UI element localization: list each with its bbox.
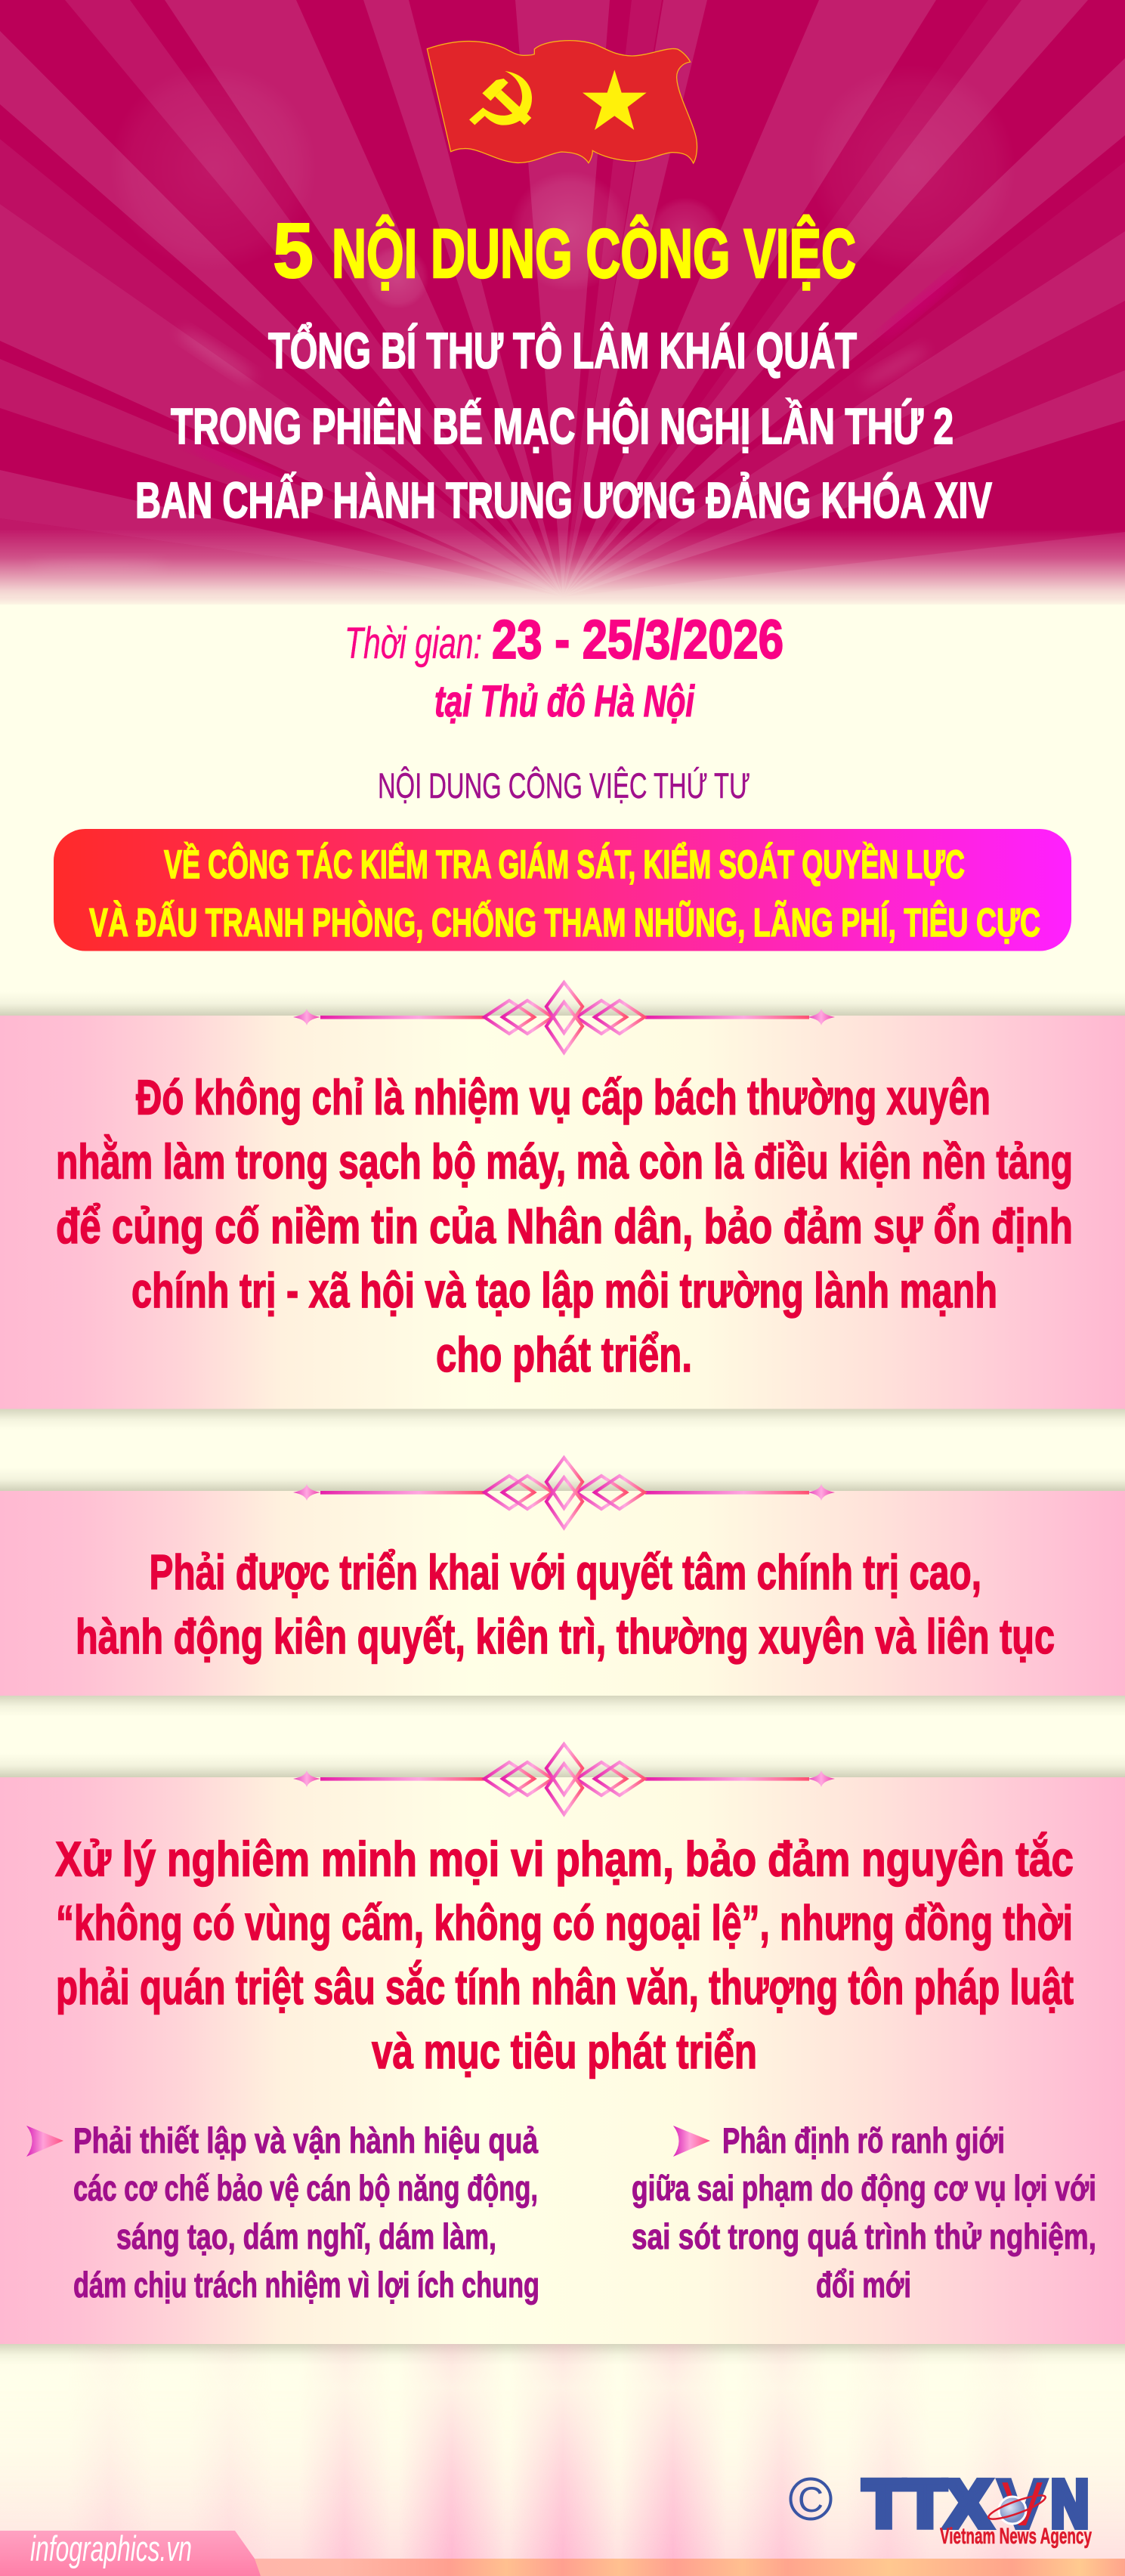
flag: party flag with hammer, sickle and star — [427, 41, 697, 163]
panel 3 ornament — [293, 1744, 835, 1814]
left column text: sáng tạo, dám nghĩ, dám làm, — [116, 2216, 496, 2256]
time label: Thời gian: — [345, 619, 482, 668]
panel 3 body text: và mục tiêu phát triển — [372, 2024, 757, 2079]
footer: curtain streaks background — [0, 2344, 1125, 2559]
heading number: 5 — [273, 207, 314, 294]
panel 2: political determination — [0, 1458, 1125, 1717]
left column text — [73, 2120, 539, 2305]
panel 3: handling violations — [0, 1744, 1125, 2365]
left column text: các cơ chế bảo vệ cán bộ năng động, — [73, 2168, 538, 2208]
right column text — [632, 2120, 1096, 2305]
logo: TTXVN Vietnam News Agency — [863, 2466, 1092, 2549]
heading white line 1: TỔNG BÍ THƯ TÔ LÂM KHÁI QUÁT — [268, 323, 857, 379]
panel 1 ornament — [293, 982, 835, 1053]
right column text: đổi mới — [816, 2265, 911, 2305]
left column text: dám chịu trách nhiệm vì lợi ích chung — [73, 2265, 539, 2305]
place: tại Thủ đô Hà Nội — [434, 677, 695, 726]
icon: left arrow bullet — [26, 2126, 63, 2157]
footer band — [0, 2559, 1125, 2576]
time and place — [345, 610, 783, 726]
section subtitle: NỘI DUNG CÔNG VIỆC THỨ TƯ — [378, 765, 750, 806]
icon: copyright symbol: C — [798, 2479, 824, 2519]
icon: copyright symbol — [790, 2479, 831, 2519]
left column text: Phải thiết lập và vận hành hiệu quả — [73, 2120, 539, 2160]
logo: TTXVN Vietnam News Agency: V — [998, 2466, 1046, 2543]
panel 2 body text — [76, 1545, 1055, 1664]
banner: section topic pill — [54, 829, 1071, 951]
panel 2 ornament — [293, 1458, 835, 1528]
logo: TTXVN Vietnam News Agency: TTX — [863, 2468, 991, 2540]
panel 1 body text — [56, 1070, 1073, 1382]
heading yellow line: NỘI DUNG CÔNG VIỆC — [332, 215, 856, 292]
logo: TTXVN Vietnam News Agency: N — [1051, 2468, 1089, 2540]
website credit: infographics.vn — [30, 2528, 192, 2568]
title: main heading — [135, 207, 992, 529]
panel 1: urgent task — [0, 982, 1125, 1430]
date: 23 - 25/3/2026 — [492, 610, 783, 670]
panel 3 body text — [55, 1832, 1074, 2079]
panel 1 body text: cho phát triển. — [436, 1327, 692, 1382]
footer tab — [0, 2531, 261, 2576]
icon: right arrow bullet — [673, 2126, 710, 2157]
header: sunburst background — [0, 0, 1125, 611]
right column text: Phân định rõ ranh giới — [722, 2120, 1005, 2160]
